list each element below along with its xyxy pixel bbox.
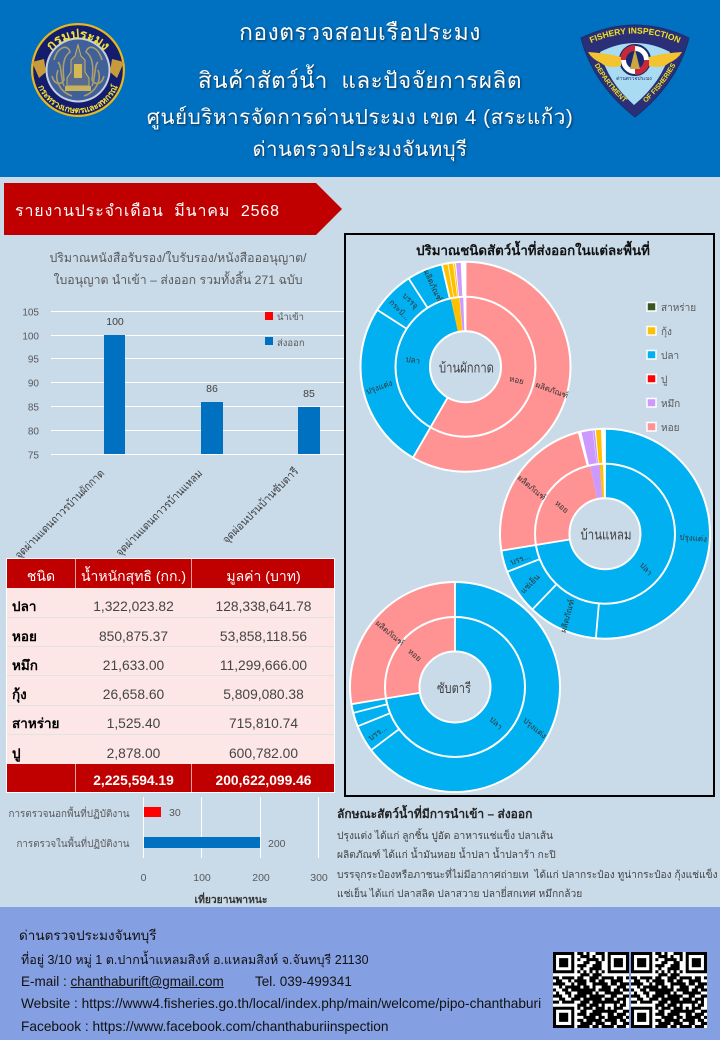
panel title: ปริมาณชนิดสัตว์น้ำที่ส่งออกในแต่ละพื้นที่ (416, 240, 650, 258)
title line 2: สินค้าสัตว์น้ำ และปัจจัยการผลิต (198, 68, 522, 93)
chart: Ban Phakkad: บ้านผักกาด (439, 360, 494, 376)
y axis labels: 80 (28, 426, 39, 438)
category labels: จุดผ่านแดนถาวรบ้านแหลม (114, 468, 205, 559)
table rows block: หมึก (12, 658, 38, 673)
table rows block: 715,810.74 (229, 716, 298, 730)
bar: inside area: 200 (268, 838, 286, 850)
table rows block: 128,338,641.78 (216, 598, 311, 614)
category labels: จุดผ่านแดนถาวรบ้านผักกาด (13, 468, 107, 562)
x axis labels: 100 (193, 872, 211, 884)
bar values: 100 (106, 316, 124, 328)
icon: fishery inspection shield (580, 24, 690, 118)
title line 4: ด่านตรวจประมงจันทบุรี (252, 139, 468, 161)
y axis labels: 105 (22, 308, 39, 318)
chart: Sap Tari (350, 582, 560, 792)
table rows block: 850,875.37 (99, 628, 168, 644)
bar: outside area: 30 (169, 807, 181, 819)
chart: Sap Tari: หอย (406, 647, 423, 663)
line 2: ผลิตภัณฑ์ ได้แก่ น้ำมันหอย น้ำปลา น้ำปลาร้า กะปิ (337, 850, 556, 861)
table rows block: 11,299,666.00 (220, 658, 307, 673)
y axis labels: 75 (28, 450, 39, 462)
table rows block: 1,525.40 (107, 716, 160, 730)
website: Website : https://www4.fisheries.go.th/local/index.php/main/welcome/pipo-chanthaburi (21, 996, 541, 1011)
chart: Ban Laem: ปรุงแต่ง (679, 533, 707, 544)
bar: outside area (8, 806, 181, 820)
address: ที่อยู่ 3/10 หมู่ 1 ต.ปากน้ำแหลมสิงห์ อ.แหลมสิงห์ จ.จันทบุรี 21130 (21, 953, 369, 967)
table rows block: 53,858,118.56 (220, 628, 307, 644)
chart: Sap Tari: บรร... (367, 723, 388, 742)
bar values: 85 (303, 388, 315, 400)
chart: Ban Laem: บ้านแหลม (580, 527, 632, 543)
heading: ลักษณะสัตว์น้ำที่มีการนำเข้า – ส่งออก (337, 807, 532, 821)
line 4: แช่เย็น ได้แก่ ปลาสลิด ปลาสวาย ปลายี่สกเทศ หมึกกล้วย (337, 889, 582, 900)
icon: QR codes (553, 952, 707, 1028)
email and telephone: E-mail : chanthaburift@gmail.com (21, 974, 224, 989)
icon: fishery inspection shield: FISHERY INSPECTION (589, 28, 681, 43)
legend: ส่งออก (277, 338, 305, 349)
chart title: certificates: ใบอนุญาต นำเข้า – ส่งออก รวมทั้งสิ้น 271 ฉบับ (54, 273, 302, 287)
chart: Ban Phakkad: กระป๋... (387, 298, 411, 322)
contact name: ด่านตรวจประมงจันทบุรี (19, 928, 157, 943)
icon: fishery inspection shield: ด่านตรวจประมง (616, 76, 652, 82)
icon: fishery inspection shield: DEPARTMENT (594, 63, 628, 102)
table rows block: กุ้ง (12, 687, 27, 702)
table rows block: 21,633.00 (103, 658, 164, 673)
legend (265, 312, 305, 349)
chart: Ban Laem: ผลิตภัณฑ์ (516, 473, 548, 502)
category labels: จุดผ่อนปรนบ้านซับตารี (220, 465, 301, 546)
panel: export species by area (344, 233, 715, 797)
table rows block: 2,878.00 (107, 746, 160, 760)
y axis labels: 95 (28, 354, 39, 366)
legend: นำเข้า (277, 312, 304, 323)
legend: species: หมึก (661, 398, 680, 410)
table rows block: ชนิด (27, 568, 55, 584)
chart: Sap Tari: ปลา (487, 715, 504, 732)
table rows block: ปู (12, 746, 21, 760)
text block: product characteristics (337, 804, 718, 900)
x axis labels: 0 (141, 872, 147, 884)
bar: inside area: การตรวจในพื้นที่ปฏิบัติงาน (16, 836, 130, 850)
header banner (0, 0, 720, 177)
bar: inside area (16, 836, 286, 850)
chart: Ban Laem: แช่เย็น (518, 571, 542, 595)
legend: species: สาหร่าย (661, 303, 696, 314)
data table: species, weight, value (6, 558, 335, 793)
chart: Ban Phakkad: ผลิตภัณฑ์ (421, 268, 445, 303)
y axis labels: 90 (28, 378, 39, 390)
chart: Ban Laem: ผลิตภัณฑ์ (558, 598, 576, 634)
ribbon text: รายงานประจำเดือน มีนาคม 2568 (15, 203, 280, 220)
bar values (106, 316, 315, 400)
chart: Sap Tari: ปรุงแต่ง (521, 716, 548, 740)
chart title: certificates (49, 251, 307, 288)
title line 1: กองตรวจสอบเรือประมง (239, 19, 481, 45)
table rows block: 200,622,099.46 (216, 773, 311, 788)
legend: species: กุ้ง (661, 326, 672, 338)
legend: species: ปลา (661, 351, 679, 362)
chart: Ban Phakkad: หอย (508, 374, 525, 386)
chart: Ban Phakkad: ผลิตภัณฑ์ (534, 379, 570, 400)
table rows block: 26,658.60 (103, 687, 164, 702)
y axis labels: 100 (22, 332, 39, 342)
chart: Ban Laem: บรร... (509, 552, 531, 567)
legend: species: ปู (661, 375, 667, 386)
icon: fishery inspection shield: OF FISHERIES (644, 63, 675, 102)
chart: Ban Phakkad (360, 262, 570, 472)
table rows block: 5,809,080.38 (223, 687, 304, 702)
table rows block: ปลา (12, 598, 36, 614)
table rows block: สาหร่าย (12, 716, 59, 730)
bar chart: patrol trips (8, 797, 328, 906)
chart: Ban Laem: ปลา (638, 561, 654, 578)
bars (104, 335, 320, 454)
chart: Ban Laem (500, 429, 710, 639)
footer: contact (0, 907, 720, 1040)
table rows block: 2,225,594.19 (93, 773, 174, 788)
x axis labels: 200 (252, 872, 270, 884)
bar chart: certificates per checkpoint (13, 308, 344, 562)
line 1: ปรุงแต่ง ได้แก่ ลูกชิ้น ปูอัด อาหารแช่แข็ง ปลาเส้น (337, 831, 553, 842)
report month ribbon (4, 183, 342, 235)
table rows block: หอย (12, 628, 37, 644)
facebook: Facebook : https://www.facebook.com/chanthaburiinspection (21, 1019, 388, 1034)
bar: outside area: การตรวจนอกพื้นที่ปฏิบัติงาน (8, 806, 130, 820)
icon: department of fisheries seal (31, 23, 125, 117)
chart: Ban Phakkad: ปลา (405, 355, 421, 366)
line 3: บรรจุกระป๋องหรือภาชนะที่ไม่มีอากาศถ่ายเท ได้แก่ ปลากระป๋อง ทูน่ากระป๋อง กุ้งแช่แข็ง (337, 870, 718, 881)
legend: species: หอย (661, 423, 679, 434)
x axis labels (141, 872, 328, 884)
chart: Sap Tari: ผลิตภัณฑ์ (374, 618, 406, 647)
chart: Ban Laem: หอย (553, 499, 570, 515)
chart: Ban Phakkad: ปรุงแต่ง (365, 378, 394, 396)
y axis labels: 85 (28, 402, 39, 414)
email and telephone: Tel. 039-499341 (255, 974, 352, 989)
table rows block: มูลค่า (บาท) (226, 568, 301, 584)
chart title: certificates: ปริมาณหนังสือรับรอง/ใบรับรอง/หนังสือออนุญาต/ (49, 251, 307, 265)
y axis labels (22, 308, 39, 462)
chart: Ban Phakkad: บรรจุ (401, 291, 420, 311)
axis title: เที่ยวยานพาหนะ (195, 892, 267, 906)
email and telephone (21, 974, 352, 989)
icon: department of fisheries seal: กรมประมง (48, 28, 109, 50)
icon: department of fisheries seal: กระทรวงเกษตรและสหกรณ์ (38, 83, 118, 114)
legend: species (647, 302, 696, 434)
sunburst charts panel content (349, 240, 711, 793)
bar values: 86 (206, 383, 218, 395)
table rows block: น้ำหนักสุทธิ (กก.) (81, 568, 186, 584)
table rows block: 1,322,023.82 (93, 598, 174, 614)
table rows block (7, 559, 334, 792)
title line 3: ศูนย์บริหารจัดการด่านประมง เขต 4 (สระแก้ว) (147, 106, 573, 129)
table rows block: 600,782.00 (229, 746, 298, 760)
x axis labels: 300 (310, 872, 328, 884)
category labels (13, 465, 301, 562)
chart: Sap Tari: ซับตารี (437, 680, 471, 696)
